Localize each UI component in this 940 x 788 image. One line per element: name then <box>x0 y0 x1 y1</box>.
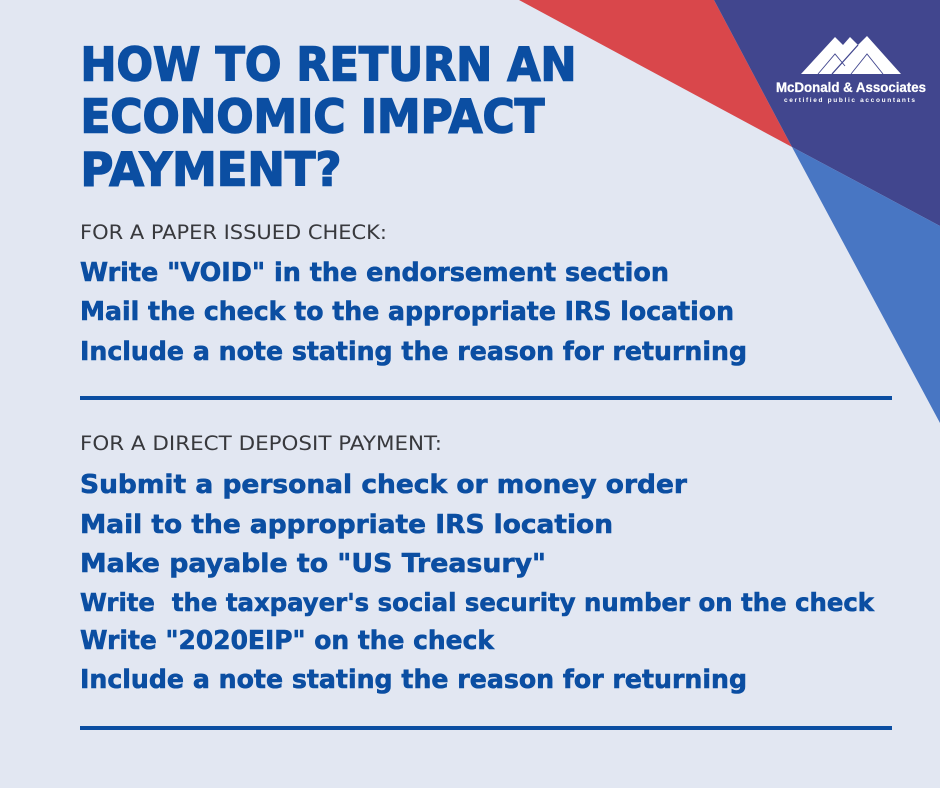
logo tagline: certified public accountants <box>784 97 915 104</box>
title: PAYMENT? <box>80 142 342 196</box>
direct deposit steps: Submit a personal check or money order <box>80 470 687 500</box>
logo name: McDonald & Associates <box>776 79 926 95</box>
title <box>80 38 576 196</box>
logo <box>776 36 926 104</box>
paper check steps: Write "VOID" in the endorsement section <box>80 258 669 288</box>
direct deposit steps: Write the taxpayer's social security number on the check <box>80 588 875 617</box>
paper check steps: Mail the check to the appropriate IRS location <box>80 297 734 327</box>
title: ECONOMIC IMPACT <box>80 90 545 144</box>
paper check steps: Include a note stating the reason for returning <box>80 337 747 367</box>
navy shape <box>714 0 940 226</box>
red triangle <box>519 0 792 147</box>
icon: mountains <box>801 36 901 74</box>
paper check steps <box>80 258 747 367</box>
subheading: paper check: FOR A PAPER ISSUED CHECK: <box>80 221 387 244</box>
subheading: direct deposit: FOR A DIRECT DEPOSIT PAYMENT: <box>80 432 442 455</box>
direct deposit steps: Include a note stating the reason for returning <box>80 665 747 695</box>
direct deposit steps: Mail to the appropriate IRS location <box>80 510 613 540</box>
direct deposit steps: Write "2020EIP" on the check <box>80 626 495 656</box>
direct deposit steps <box>80 470 875 695</box>
blue triangle <box>792 147 940 423</box>
direct deposit steps: Make payable to "US Treasury" <box>80 549 546 579</box>
title: HOW TO RETURN AN <box>80 38 576 92</box>
